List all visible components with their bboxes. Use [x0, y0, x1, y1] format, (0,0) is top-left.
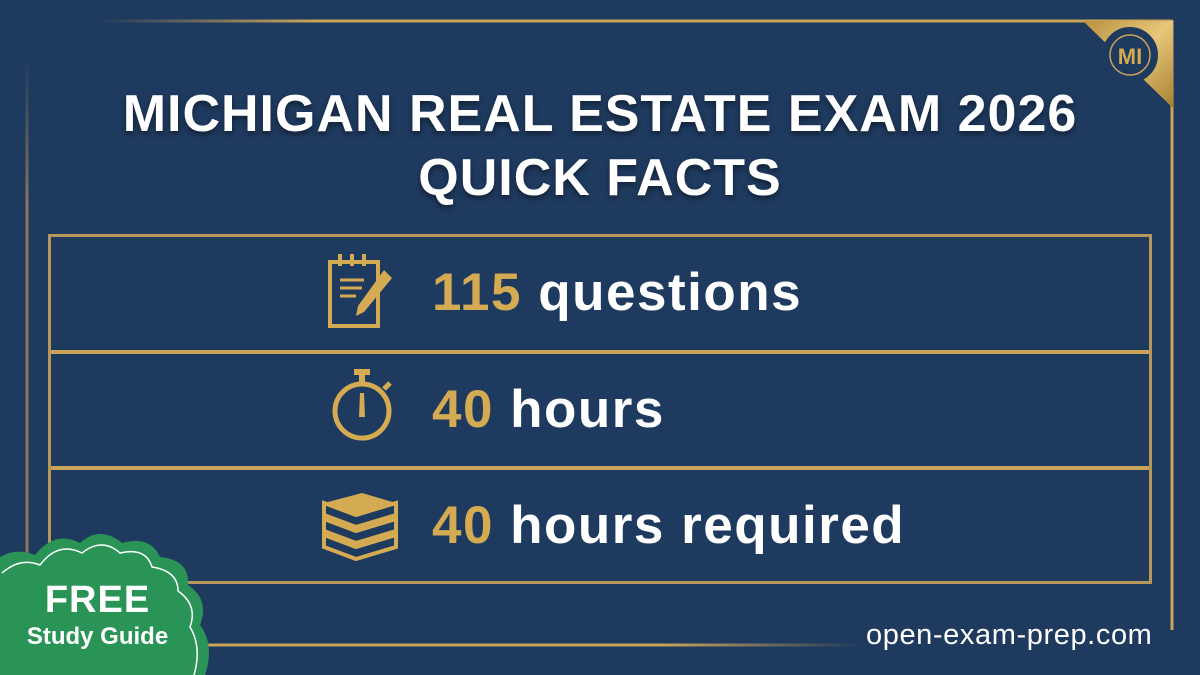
badge: FREE Study Guide — [0, 534, 209, 675]
text: FREE: FREE — [45, 579, 150, 621]
icon: stack of books — [322, 493, 398, 562]
row: hours required — [322, 493, 905, 562]
text: 115 questions: 115 questions — [432, 262, 802, 322]
icon: notepad and pencil — [328, 254, 392, 328]
title: MICHIGAN REAL ESTATE EXAM 2026 — [123, 85, 1077, 143]
text: 40 hours: 40 hours — [432, 380, 665, 438]
text: 40 hours required: 40 hours required — [432, 496, 905, 554]
icon: stopwatch — [332, 369, 392, 440]
corner badge: MI: MI — [1118, 44, 1142, 69]
row: hours — [332, 369, 665, 440]
facts table frame — [48, 234, 1152, 584]
text: Study Guide: Study Guide — [27, 623, 168, 650]
title: QUICK FACTS — [418, 149, 782, 207]
corner badge: MI — [1083, 21, 1173, 108]
footer url: open-exam-prep.com — [866, 619, 1152, 651]
row: questions — [328, 254, 802, 328]
title — [123, 85, 1077, 210]
